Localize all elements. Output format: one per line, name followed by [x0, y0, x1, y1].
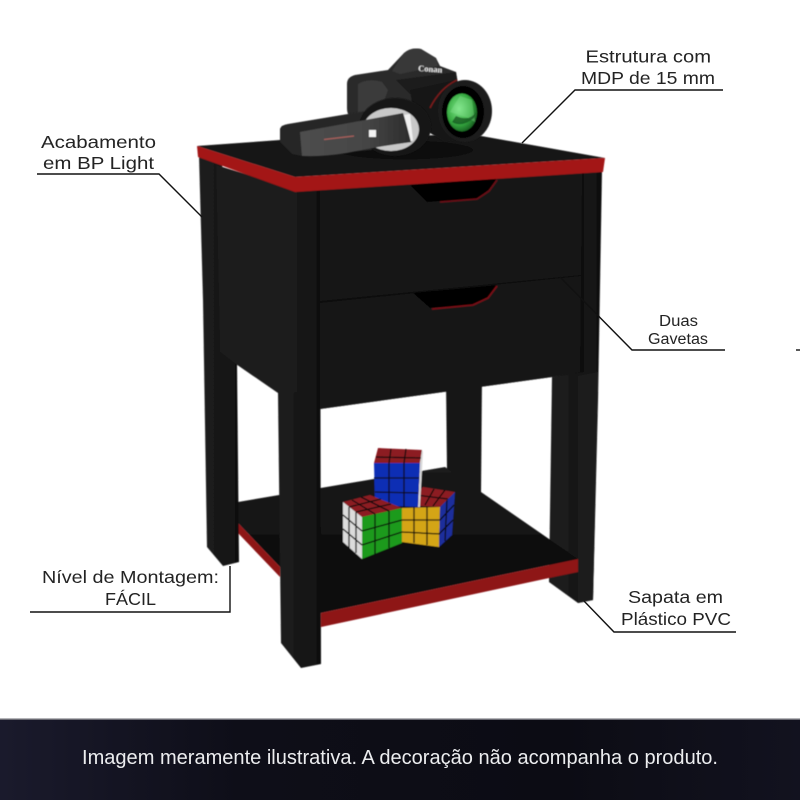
camera — [347, 48, 492, 142]
disclaimer text: Imagem meramente ilustrativa. A decoração não acompanha o produto. — [82, 746, 718, 769]
callout: montagem: FÁCIL — [105, 589, 156, 609]
camera brand: Conan — [418, 63, 443, 75]
callout: estrutura: MDP de 15 mm — [581, 68, 715, 88]
callout: gavetas: Duas — [659, 313, 698, 330]
top drawer — [320, 172, 582, 301]
callout: montagem — [30, 566, 230, 612]
lower shelf — [238, 467, 578, 627]
red edge left — [197, 146, 295, 192]
callout: estrutura — [522, 47, 723, 143]
table top — [197, 134, 605, 192]
callout: sapata: Plástico PVC — [621, 609, 731, 629]
callout: acabamento: Acabamento — [41, 132, 156, 152]
lens barrel — [410, 80, 468, 142]
side panel — [216, 165, 298, 395]
back band — [280, 110, 372, 156]
ear cup — [359, 98, 431, 156]
headphones — [280, 98, 431, 156]
rubik cube: green — [343, 495, 402, 559]
lens — [438, 80, 492, 142]
rubik cube: blue — [374, 448, 423, 507]
button — [369, 130, 376, 137]
callout: acabamento: em BP Light — [43, 153, 154, 173]
right front leg — [549, 170, 602, 603]
front corner leg — [278, 184, 321, 668]
nightstand furniture — [197, 134, 605, 668]
callout: gavetas: Gavetas — [648, 331, 708, 348]
callout: estrutura: Estrutura com — [586, 47, 711, 67]
stray tick mark — [796, 349, 800, 351]
cabinet underlay — [318, 170, 584, 409]
callout: sapata: Sapata em — [628, 587, 723, 607]
callout: montagem: Nível de Montagem: — [42, 567, 219, 587]
red edge front — [321, 559, 578, 627]
drawer handle — [410, 178, 497, 202]
front band — [300, 113, 412, 156]
callout: sapata — [584, 587, 736, 632]
callout: gavetas — [560, 277, 725, 350]
footer disclaimer band — [0, 718, 800, 800]
back right leg — [446, 375, 482, 495]
rubik cube: yellow — [402, 487, 455, 547]
red edge front — [295, 158, 605, 192]
drawer handle — [413, 285, 497, 308]
red edge side — [238, 523, 280, 577]
callout: acabamento — [37, 132, 202, 217]
bottom drawer — [320, 276, 581, 409]
back left leg — [199, 155, 239, 566]
